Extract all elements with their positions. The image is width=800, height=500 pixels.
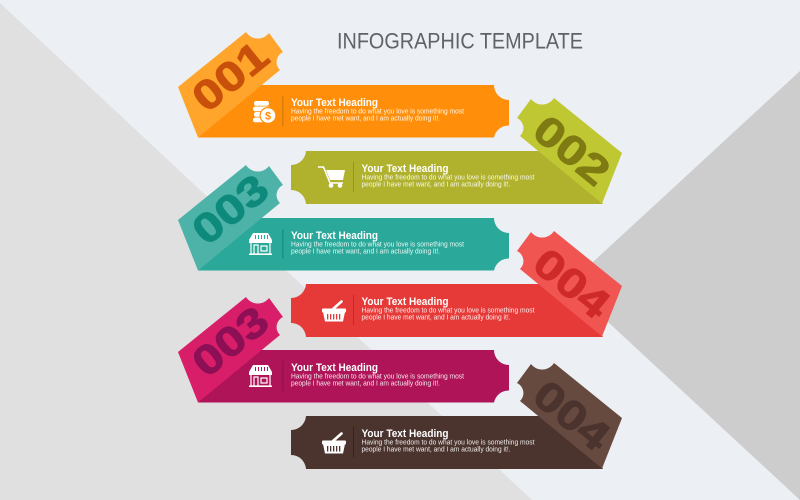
panel: ribbon 003 teal [178, 165, 509, 270]
panel: ribbon 002: 002 [525, 106, 619, 195]
text block: people I have met want, and I am actually doing it!. [291, 115, 440, 122]
text block: people I have met want, and I am actually doing it!. [291, 380, 440, 387]
icon: basket [322, 302, 346, 322]
text block: Having the freedom to do what you love is something most [362, 307, 535, 314]
text block: people I have met want, and I am actually doing it!. [291, 248, 440, 255]
icon: coins: $ [265, 110, 271, 122]
icon: basket [322, 434, 346, 454]
text block [362, 296, 535, 321]
text block [291, 97, 464, 122]
panel: ribbon 004 red [291, 231, 622, 337]
panel: ribbon 002 [291, 98, 622, 204]
text block: Your Text Heading [362, 163, 448, 175]
panel: ribbon 004 brown [291, 363, 622, 469]
panel: ribbon 003 teal: 003 [183, 165, 277, 254]
text block: people I have met want, and I am actually doing it!. [362, 314, 511, 321]
panel: ribbon 001 [178, 32, 509, 138]
icon: store [249, 365, 272, 387]
text block [291, 362, 464, 387]
panel: ribbon 001: 001 [183, 32, 277, 121]
text block [362, 163, 535, 188]
title: INFOGRAPHIC TEMPLATE [337, 28, 583, 54]
text block: people I have met want, and I am actually doing it!. [362, 446, 511, 453]
text block: Having the freedom to do what you love is something most [362, 174, 535, 181]
text block: people I have met want, and I am actually doing it!. [362, 181, 511, 188]
text block: Having the freedom to do what you love is something most [362, 439, 535, 446]
panel: ribbon 004 red: 004 [525, 239, 619, 328]
text block: Your Text Heading [291, 362, 378, 374]
panel: ribbon 003 magenta: 003 [183, 297, 277, 386]
icon: store [249, 233, 272, 255]
text block: Your Text Heading [291, 97, 378, 109]
text block [362, 428, 535, 453]
text block: Having the freedom to do what you love is something most [291, 373, 464, 380]
text block: Your Text Heading [291, 230, 378, 242]
panel: ribbon 003 magenta [178, 297, 509, 402]
icon: shopping cart [318, 167, 345, 188]
text block: Having the freedom to do what you love is something most [291, 108, 464, 115]
panel: ribbon 004 brown: 004 [525, 371, 619, 460]
icon: coins [253, 101, 276, 124]
text block: Your Text Heading [362, 428, 448, 440]
text block: Having the freedom to do what you love is something most [291, 241, 464, 248]
text block: Your Text Heading [362, 296, 448, 308]
text block [291, 230, 464, 255]
